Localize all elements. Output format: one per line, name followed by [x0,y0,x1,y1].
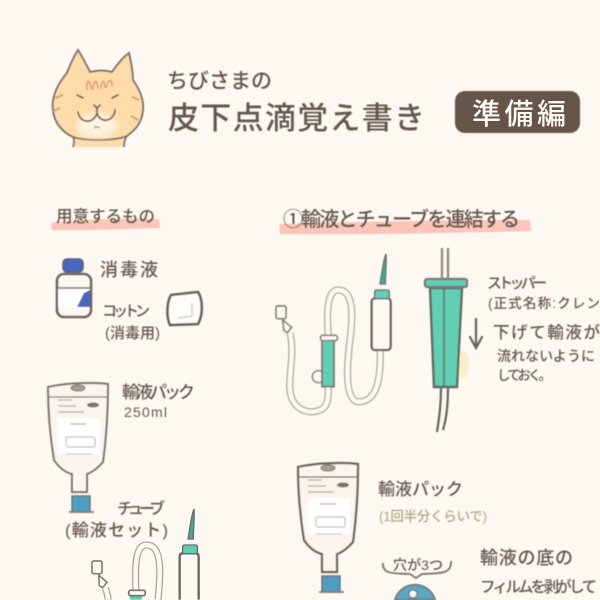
label: stopper: ストッパー [487,275,547,292]
text: lower so fluid does not flow: 下げて輸液が [493,322,600,342]
label: about one and a half doses: (1回半分くらいで) [379,509,487,524]
label: cotton: コットン [102,303,150,320]
text: peel the film at the bottom of the pack: 輸液の底の [480,548,573,568]
callout: three holes: 穴が3つ [393,557,443,573]
label: infusion set: (輸液セット) [65,521,168,540]
heading: items to prepare: 用意するもの [56,207,155,226]
text: peel the film at the bottom of the pack: フィルムを剥がして [480,577,597,596]
text: lower so fluid does not flow: しておく。 [497,368,552,383]
icon: clamp close-up [425,248,469,432]
connector [276,306,292,333]
icon: infusion pack, right [298,463,358,592]
label: infusion pack, step 1: 輸液パック [378,480,463,499]
label: infusion pack: 輸液パック [122,383,195,402]
text: peel the film at the bottom of the pack [480,548,597,596]
icon: cat face [53,50,143,147]
title [167,70,425,136]
title line 2: 皮下点滴覚え書き [168,101,425,136]
icon: infusion tube set, right [276,254,391,412]
drip chamber [372,254,391,350]
text: lower so fluid does not flow: 流れないように [497,348,595,364]
badge: preparation [455,91,580,133]
label: for disinfecting: (消毒用) [105,324,160,342]
clamp [312,335,337,387]
title line 1: ちびさまの [167,70,272,93]
icon: port seen from below [395,585,435,600]
icon: disinfectant bottle [57,259,91,317]
label: 250ml: 250ml [124,404,167,420]
text: lower so fluid does not flow [493,322,600,383]
badge: preparation: 準備編 [472,98,566,131]
icon: infusion pack, left [48,383,108,512]
icon: infusion tube set, left [92,509,199,600]
tube [290,290,380,412]
icon: cotton pad [167,292,202,325]
label: formal name: (正式名称:クレン [488,296,600,311]
callout: three holes [383,557,451,578]
label: tube: チューブ [117,499,165,518]
label: disinfectant: 消毒液 [100,260,158,280]
arrow: down [470,319,482,348]
heading: step 1 connect pack and tube: ①輸液とチューブを連結する [283,207,520,231]
